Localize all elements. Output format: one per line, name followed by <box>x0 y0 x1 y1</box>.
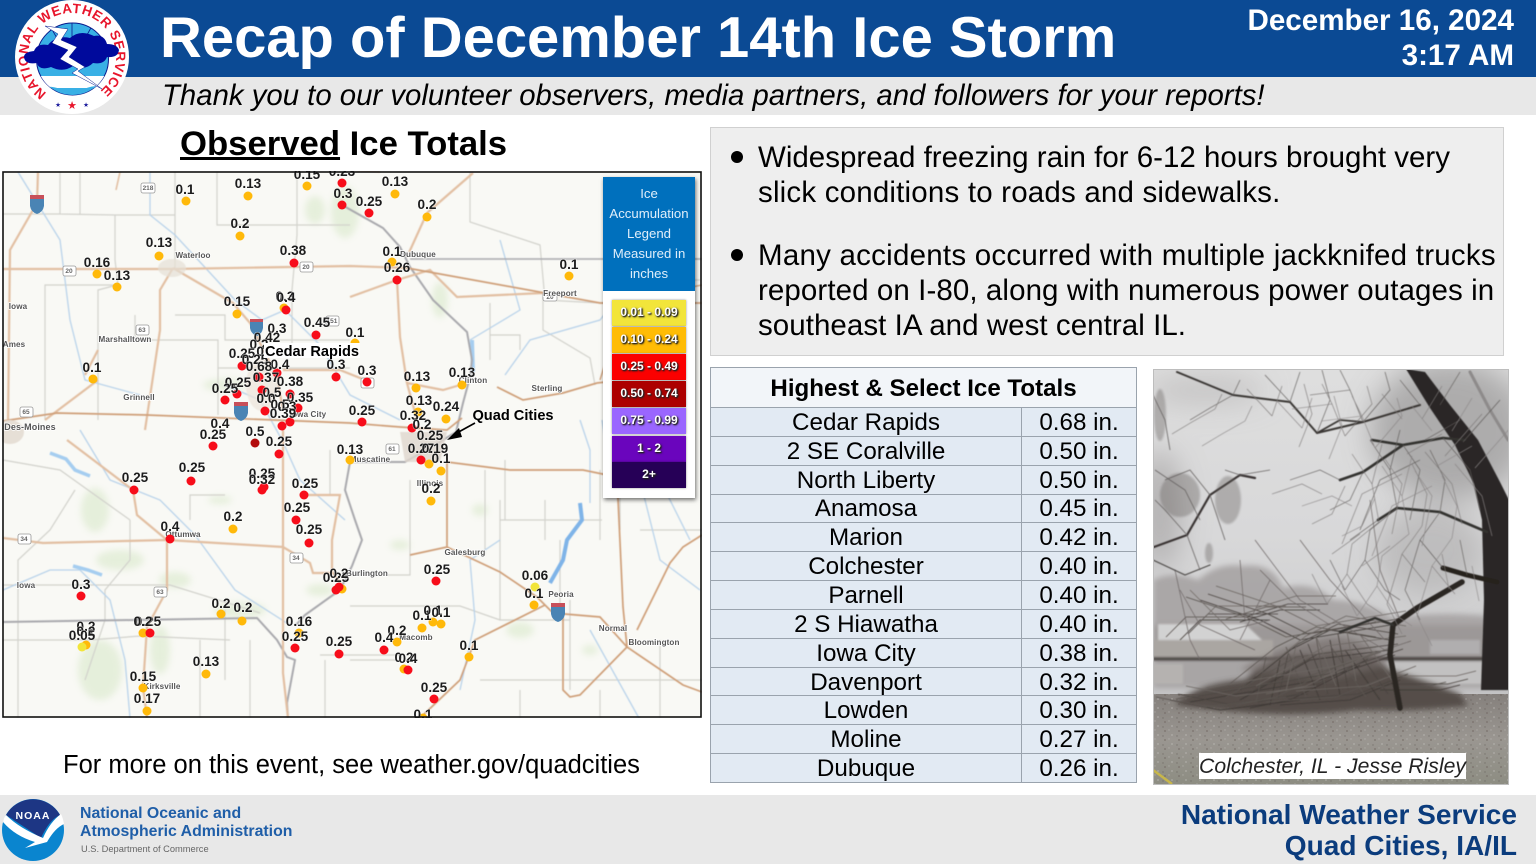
town labels: Galesburg <box>445 548 485 557</box>
map: observed ice totals <box>2 171 702 718</box>
station value labels: 0.3 <box>334 186 353 201</box>
legend scale swatches: 0.01 - 0.09 <box>620 305 678 319</box>
town labels: Marshalltown <box>99 335 151 344</box>
town labels: Macomb <box>399 633 433 642</box>
station value labels: 0.2 <box>418 197 437 212</box>
station value labels: 0.4 <box>161 519 180 534</box>
station value labels: 0.25 <box>249 466 276 481</box>
station value labels: 0.2 <box>413 417 432 432</box>
station value labels: 0.24 <box>433 399 460 414</box>
NOAA department: U.S. Department of Commerce <box>81 844 209 854</box>
station value labels: 0.15 <box>224 294 251 309</box>
station value labels: 0.19 <box>422 441 449 456</box>
station value labels: 0.13 <box>406 393 433 408</box>
highways <box>3 170 543 718</box>
station value labels: 0.2 <box>212 596 231 611</box>
station value labels: 0.25 <box>417 428 444 443</box>
NWS office name: Quad Cities, IA/IL <box>1285 830 1517 861</box>
station value labels: 0.2 <box>77 624 96 639</box>
station value labels: 0.1 <box>432 451 451 466</box>
station value labels: 0.5 <box>246 424 265 439</box>
highway shields: 20 <box>65 268 73 275</box>
station value labels: 0.25 <box>179 460 206 475</box>
table: highest and select ice totals: Davenport <box>810 669 922 696</box>
table: highest and select ice totals: North Liberty <box>797 467 935 494</box>
station value labels: 0.5 <box>263 385 282 400</box>
NWS office name <box>1181 799 1517 861</box>
station value labels: 0.13 <box>449 365 476 380</box>
yellow strap <box>1153 770 1172 784</box>
ground <box>1153 694 1509 785</box>
station value labels: 0.4 <box>399 651 418 666</box>
legend scale swatches: 1 - 2 <box>637 441 661 455</box>
county and state roads <box>3 172 702 718</box>
station value labels: 0.13 <box>404 369 431 384</box>
tree trunk and major limbs <box>1153 369 1509 708</box>
station value labels: 0.42 <box>254 330 281 345</box>
highway shields: 34 <box>20 536 28 543</box>
hanging iced foliage <box>1154 389 1241 563</box>
station value labels: 0.25 <box>122 470 149 485</box>
highway shields: 65 <box>22 409 30 416</box>
vegetation patches <box>78 186 598 700</box>
table: highest and select ice totals: Marion <box>829 524 903 551</box>
date and time: 3:17 AM <box>1402 39 1514 72</box>
table: highest and select ice totals <box>710 367 1137 783</box>
town labels <box>3 250 680 691</box>
station value labels: 0.2 <box>77 619 96 634</box>
table: highest and select ice totals: 0.42 in. <box>1039 524 1119 551</box>
header banner <box>0 0 1536 77</box>
town labels: Burlington <box>346 569 388 578</box>
table: highest and select ice totals: 0.40 in. <box>1039 553 1119 580</box>
station value labels: 0.25 <box>326 634 353 649</box>
station value labels: 0.35 <box>287 390 314 405</box>
station value labels: 0.3 <box>268 321 287 336</box>
station value labels: 0.2 <box>234 600 253 615</box>
urban areas <box>400 432 447 462</box>
table: highest and select ice totals: 0.45 in. <box>1039 495 1119 522</box>
highway shields: 30 <box>363 380 371 387</box>
station value labels: 0.16 <box>286 614 313 629</box>
highway shields: 20 <box>546 294 554 301</box>
icon: NWS logo: ★ <box>67 99 77 112</box>
table: highest and select ice totals: Moline <box>830 726 902 753</box>
station value labels: 0.25 <box>135 614 162 629</box>
table: highest and select ice totals: Dubuque <box>817 755 915 782</box>
station value labels: 0.15 <box>130 669 157 684</box>
station value labels: 0.13 <box>382 174 409 189</box>
table: highest and select ice totals: Cedar Rapids <box>792 409 940 436</box>
station value labels: 0.4 <box>277 290 296 305</box>
highway shields <box>18 183 565 622</box>
table: highest and select ice totals: 0.26 in. <box>1039 755 1119 782</box>
station value labels: 0.13 <box>193 654 220 669</box>
station value labels: 0.25 <box>421 680 448 695</box>
bullet 2: Many accidents occurred with multiple jackknifed trucks <box>758 239 1496 272</box>
station value labels: 0.4 <box>271 357 290 372</box>
station value labels: 0.13 <box>146 235 173 250</box>
table: highest and select ice totals: Colchester <box>808 553 924 580</box>
NOAA name: Atmospheric Administration <box>80 823 292 840</box>
table: highest and select ice totals: Highest & Select Ice Totals <box>770 374 1077 402</box>
bullet 1: slick conditions to roads and sidewalks. <box>758 176 1280 209</box>
station value labels: 0.3 <box>358 363 377 378</box>
table: highest and select ice totals: Iowa City <box>816 640 916 667</box>
town labels: Dubuque <box>400 250 436 259</box>
rivers <box>3 172 700 720</box>
legend heading <box>603 177 695 291</box>
icon: NOAA logo: NOAA <box>16 810 50 822</box>
station value labels: 0.25 <box>266 434 293 449</box>
subtitle band <box>0 77 1536 115</box>
fine twigs <box>1153 370 1512 646</box>
town labels: Iowa <box>17 581 36 590</box>
link note: For more on this event, see weather.gov/quadcities <box>63 751 640 779</box>
table: highest and select ice totals: 0.32 in. <box>1039 669 1119 696</box>
station value labels: 0.25 <box>212 381 239 396</box>
station value labels: 0.3 <box>72 577 91 592</box>
station value labels: 0.1 <box>424 603 443 618</box>
table: highest and select ice totals: 0.38 in. <box>1039 640 1119 667</box>
legend scale swatches: 0.25 - 0.49 <box>620 359 678 373</box>
station value labels: 0.25 <box>229 346 256 361</box>
table: highest and select ice totals: 0.68 in. <box>1039 409 1119 436</box>
town labels: Clinton <box>459 376 487 385</box>
highway shields: 63 <box>138 327 146 334</box>
station value labels: 0.17 <box>134 691 160 706</box>
town labels: Peoria <box>548 590 574 599</box>
station value labels: 0.68 <box>246 359 273 374</box>
highway shields: 218 <box>143 185 154 192</box>
legend scale swatches <box>610 298 688 490</box>
town labels: Ottumwa <box>165 530 201 539</box>
highway shields: 20 <box>302 264 310 271</box>
station value labels: 0.3 <box>276 289 295 304</box>
label and arrow: Quad Cities <box>447 408 554 440</box>
station value labels: 0.1 <box>176 182 195 197</box>
legend heading: Legend <box>627 226 671 241</box>
station value labels: 0.25 <box>296 522 323 537</box>
station value labels: 0.4 <box>211 416 230 431</box>
table: highest and select ice totals: Parnell <box>828 582 904 609</box>
station value labels: 0.5 <box>271 397 290 412</box>
station value labels: 0.37 <box>253 370 279 385</box>
station value labels: 0.1 <box>525 586 544 601</box>
station value labels: 0.05 <box>69 628 96 643</box>
NOAA name <box>80 805 292 840</box>
icon: NWS logo: ★ <box>55 101 61 109</box>
table: highest and select ice totals: 0.50 in. <box>1039 438 1119 465</box>
table: highest and select ice totals: 0.27 in. <box>1039 726 1119 753</box>
station value labels: 0.2 <box>422 481 441 496</box>
highway shields: 151 <box>327 318 338 325</box>
bullet 2: reported on I-80, along with numerous power outages in <box>758 274 1494 307</box>
title: Recap of December 14th Ice Storm <box>160 6 1116 70</box>
station value labels: 0.1 <box>432 605 451 620</box>
legend scale swatches: 0.50 - 0.74 <box>620 386 678 400</box>
station value labels: 0.45 <box>304 315 331 330</box>
station value labels: 0.1 <box>413 608 432 623</box>
table: highest and select ice totals: 2 S Hiawatha <box>794 611 938 638</box>
station value labels: 0.0 <box>257 391 275 406</box>
bullet 1 <box>731 141 1450 209</box>
station value labels: 0.2 <box>388 623 407 638</box>
station value labels: 0.13 <box>337 442 364 457</box>
station value labels: 0.25 <box>349 403 376 418</box>
station value labels: 0.13 <box>235 176 262 191</box>
town labels: Illinois <box>417 479 444 488</box>
legend: ice accumulation <box>603 177 695 498</box>
icon: NOAA logo <box>2 799 64 861</box>
station value labels: 0.13 <box>104 268 131 283</box>
town labels: Ames <box>3 340 26 349</box>
station value labels: 0.2 <box>395 650 414 665</box>
date and time: December 16, 2024 <box>1247 4 1514 37</box>
station value labels: 0.38 <box>277 374 304 389</box>
town labels: Normal <box>599 624 627 633</box>
fallen brush pile <box>1175 638 1468 714</box>
legend heading: Measured in <box>613 246 685 261</box>
photo caption: Colchester, IL - Jesse Risley <box>1199 755 1466 778</box>
town labels: Freeport <box>543 289 577 298</box>
highway shields: 63 <box>156 589 164 596</box>
buildings and rail line <box>1153 624 1509 684</box>
date and time <box>1247 4 1514 72</box>
footer band <box>0 795 1536 864</box>
station value labels: 0.06 <box>522 568 549 583</box>
town labels: Grinnell <box>123 393 155 402</box>
table: highest and select ice totals: 0.40 in. <box>1039 611 1119 638</box>
town labels: Waterloo <box>175 251 211 260</box>
upper-right dense canopy haze <box>1138 360 1530 595</box>
station value labels: 0.1 <box>560 257 579 272</box>
town labels: Muscatine <box>350 455 391 464</box>
station value labels: 0.2 <box>250 337 269 352</box>
station value labels: 0.4 <box>375 630 394 645</box>
station value labels: 0.1 <box>346 325 365 340</box>
table: highest and select ice totals: Anamosa <box>815 495 917 522</box>
highway shields: 61 <box>388 446 396 453</box>
NOAA name: National Oceanic and <box>80 805 241 822</box>
station value labels: 0.26 <box>384 260 411 275</box>
station value labels: 0.2 <box>231 216 250 231</box>
Mississippi river and state border <box>3 205 702 718</box>
thank-you subtitle: Thank you to our volunteer observers, media partners, and followers for your reports! <box>162 79 1265 112</box>
label: Cedar Rapids: Cedar Rapids <box>265 344 359 360</box>
table: highest and select ice totals: 0.30 in. <box>1039 697 1119 724</box>
station value labels: 0.3 <box>327 357 346 372</box>
station value labels: 0.25 <box>242 352 269 367</box>
station value labels: 0.32 <box>249 472 276 487</box>
legend heading: Accumulation <box>609 206 689 221</box>
photo: ice-damaged tree in Colchester <box>1153 369 1509 785</box>
NWS office name: National Weather Service <box>1181 799 1517 830</box>
legend scale swatches: 0.75 - 0.99 <box>620 413 678 427</box>
map heading: Observed Ice Totals <box>180 125 507 163</box>
table: highest and select ice totals: 2 SE Coralville <box>787 438 945 465</box>
town labels: Iowa City <box>290 410 327 419</box>
legend scale swatches: 0.10 - 0.24 <box>620 332 678 346</box>
station value labels: 0.25 <box>356 194 383 209</box>
bullet 1: Widespread freezing rain for 6-12 hours brought very <box>758 141 1450 174</box>
town labels: Sterling <box>532 384 562 393</box>
station value labels: 0.27 <box>408 441 434 456</box>
legend heading: inches <box>630 266 668 281</box>
station value labels: 0.1 <box>383 244 402 259</box>
bullet 2: southeast IA and west central IL. <box>758 309 1186 342</box>
station value labels: 0.25 <box>200 427 227 442</box>
station value labels: 0.25 <box>225 375 252 390</box>
table: highest and select ice totals: 0.40 in. <box>1039 582 1119 609</box>
station value labels: 0.39 <box>270 406 297 421</box>
station value labels: 0.3 <box>278 399 297 414</box>
town labels: Bloomington <box>628 638 680 647</box>
station value labels: 0.2 <box>224 509 243 524</box>
town labels: Kirksville <box>144 682 181 691</box>
legend heading: Ice <box>640 186 658 201</box>
station value labels <box>69 164 579 722</box>
station value labels: 0.25 <box>284 500 311 515</box>
town labels: Des-Moines <box>4 422 56 432</box>
table: highest and select ice totals: Lowden <box>824 697 908 724</box>
station value labels: 0.25 <box>282 629 309 644</box>
station value labels: 0.25 <box>424 562 451 577</box>
station value labels: 0.25 <box>323 570 350 585</box>
station value labels: 0.38 <box>280 243 307 258</box>
highway shields: 34 <box>292 555 300 562</box>
legend scale swatches: 2+ <box>642 467 656 481</box>
icon: NWS logo: ★ <box>83 101 89 109</box>
station value labels: 0.16 <box>84 255 111 270</box>
station value labels: 0.2 <box>134 614 153 629</box>
station value labels: 0. <box>256 344 268 359</box>
town labels: Iowa <box>9 302 28 311</box>
station value labels: 0.32 <box>400 408 427 423</box>
label and arrow: Quad Cities: Quad Cities <box>472 408 554 424</box>
station value labels: 0.2 <box>330 566 349 581</box>
panel: summary bullets <box>710 127 1504 356</box>
table: highest and select ice totals: 0.50 in. <box>1039 467 1119 494</box>
station dots <box>76 178 574 722</box>
bullet 2 <box>731 239 1496 342</box>
station value labels: 0.25 <box>292 476 319 491</box>
distant treeline <box>1153 565 1509 688</box>
station value labels: 0.1 <box>83 360 102 375</box>
station value labels: 0.1 <box>460 638 479 653</box>
icon: NWS logo: NATIONAL WEATHER SERVICE <box>18 4 126 100</box>
